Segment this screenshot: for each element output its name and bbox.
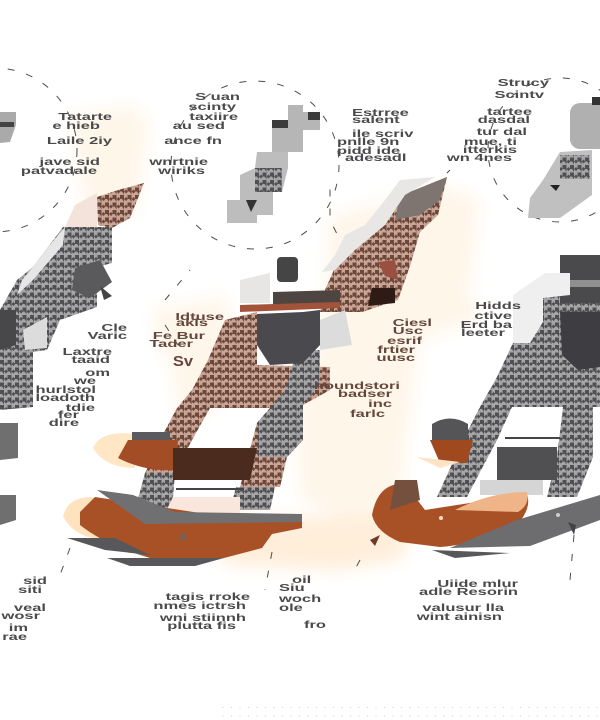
callout text: saddle: [149, 311, 224, 370]
callout text: top center: taxiire: [189, 111, 238, 122]
upper rockers: [93, 418, 560, 513]
dashed callout circles: [0, 68, 600, 590]
callout text: top center: wiriks: [157, 165, 205, 176]
callout text: top right: Scintv: [495, 89, 544, 100]
callout text: bottom center right: oil: [292, 574, 311, 585]
callout text: bottom center right: woch: [278, 593, 321, 604]
callout text: left middle: loadoth: [35, 392, 95, 403]
callout text: right middle: Erd ba: [461, 319, 512, 330]
callout text: bottom center right: ole: [279, 602, 303, 613]
callout text: top right center: adesadl: [345, 152, 406, 163]
callout text: bottom center right: [278, 574, 326, 630]
callout text: top left: jave sid: [38, 156, 100, 167]
callout text: left middle: hurlstol: [36, 384, 96, 395]
callout text: bottom right: wint ainisn: [416, 611, 502, 622]
callout text: bottom left: sid: [23, 575, 47, 586]
callout text: bottom center: [153, 591, 250, 631]
callout text: top left: Laile 2iy: [47, 135, 112, 146]
callout text: top center: [148, 91, 240, 176]
callout text: left middle: [35, 322, 127, 428]
callout text: top right: mue, ti: [464, 136, 517, 147]
callout text: bottom left: wosr: [0, 610, 41, 621]
callout text: top right center: ile scriv: [352, 128, 414, 139]
callout text: right middle: [461, 300, 521, 338]
left gray horse: [0, 183, 144, 525]
callout text: center right: Usc: [393, 325, 423, 336]
callout text: center right: uusc: [377, 352, 415, 363]
callout text: top left: patvadale: [21, 165, 97, 176]
callout text: left middle: tdie: [66, 402, 95, 413]
dotted texture: [222, 703, 600, 720]
callout text: bottom left: siti: [18, 584, 42, 595]
icon: left teddy fragment: [0, 112, 16, 143]
callout text: top right: itterkis: [463, 144, 517, 155]
callout text: left middle: Varic: [88, 330, 127, 341]
callout text: center right: [314, 317, 432, 419]
callout text: saddle: Tader: [149, 338, 194, 349]
callout text: top right center: salent: [352, 114, 400, 125]
callout text: top right center: Estrree: [352, 107, 409, 118]
callout text: saddle: Fe Bur: [153, 330, 206, 341]
callout text: top center: wnrtnie: [148, 156, 208, 167]
callout text: top right: [446, 77, 549, 163]
callout text: left middle: fer: [58, 409, 80, 420]
callout text: center right: farlc: [350, 408, 385, 419]
callout text: top right center: pidd ide: [337, 145, 401, 156]
callout text: top left: Tatarte: [58, 111, 112, 122]
callout text: right middle: leeter: [461, 327, 506, 338]
callout text: right middle: Hidds: [475, 300, 521, 311]
callout text: bottom left: im: [9, 622, 28, 633]
callout text: left middle: dire: [49, 417, 79, 428]
callout text: bottom center: tagis rroke: [166, 591, 250, 602]
callout text: top right center: pnlle 9n: [337, 136, 399, 147]
callout text: top center: au sed: [173, 120, 225, 131]
callout text: left middle: we: [73, 375, 96, 386]
callout text: top right: Strucy: [498, 77, 549, 88]
callout text: bottom center: plutta fis: [167, 620, 236, 631]
callout text: center right: inc: [368, 398, 392, 409]
callout text: top right: tur dal: [477, 126, 527, 137]
callout text: left middle: Cle: [101, 322, 127, 333]
right rocker: [372, 480, 600, 558]
callout text: left middle: om: [85, 367, 110, 378]
callout text: bottom center: nmes ictrsh: [153, 600, 246, 611]
callout text: top left: [21, 111, 112, 176]
callout text: center right: esrif: [387, 335, 423, 346]
callout text: top center: ance fn: [164, 135, 222, 146]
callout text: bottom right: valusur lla: [422, 602, 504, 613]
callout text: bottom right: adle Resorin: [419, 586, 518, 597]
callout text: center right: houndstori: [314, 380, 400, 391]
callout text: top center: scinty: [188, 101, 236, 112]
callout text: bottom left: veal: [14, 602, 46, 613]
callout text: bottom center right: fro: [304, 619, 326, 630]
callout text: bottom center right: Siu: [279, 582, 305, 593]
callout text: bottom center: wni stiinnh: [159, 612, 246, 623]
callout text: saddle: akls: [176, 317, 208, 328]
icon: center teddy: [227, 105, 320, 223]
callout text: bottom left: [0, 575, 47, 642]
right gray horse: [437, 255, 600, 497]
callout text: top right: wn 4nes: [446, 152, 512, 163]
callout text: center right: Ciesl: [393, 317, 432, 328]
icon: right teddy: [528, 97, 600, 218]
callout text: saddle: Idtuse: [175, 311, 224, 322]
callout text: left middle: Laxtre: [62, 346, 112, 357]
arrows: [100, 286, 576, 546]
callout text: bottom right: Uiide mlur: [437, 578, 519, 589]
callout text: center right: badser: [338, 388, 393, 399]
callout text: top center: S uan: [195, 91, 240, 102]
callout text: top right: tartee: [487, 106, 532, 117]
callout text: saddle: Sv: [173, 354, 193, 370]
cream glow shapes: [70, 105, 480, 570]
callout text: top right: dasdal: [478, 114, 530, 125]
callout text: top left: e hieb: [52, 120, 100, 131]
callout text: center right: frtier: [377, 344, 416, 355]
callout text: bottom left: rae: [2, 631, 27, 642]
lower rocker: [63, 490, 302, 566]
brown horse: [135, 177, 447, 510]
callout text: right middle: ctive: [474, 310, 512, 321]
callout text: left middle: taaid: [72, 354, 110, 365]
callout text: bottom right: [416, 578, 519, 622]
callout text: top right center: [337, 107, 414, 163]
